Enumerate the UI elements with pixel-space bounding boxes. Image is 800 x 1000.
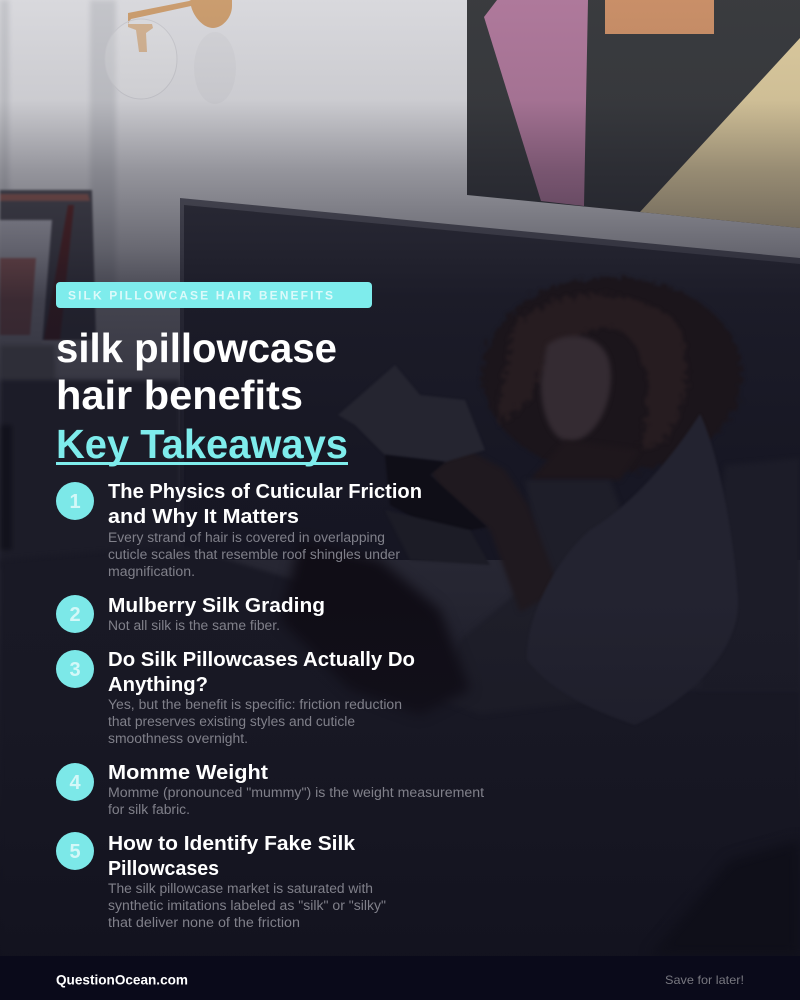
hair highlights	[495, 294, 687, 450]
title: hair benefits	[56, 372, 303, 418]
body 3	[108, 697, 402, 746]
body 4: Momme (pronounced "mummy") is the weight measurement	[108, 785, 484, 800]
title: silk pillowcase	[56, 325, 337, 371]
heading 1: and Why It Matters	[108, 505, 299, 528]
neck and chest	[530, 440, 640, 480]
takeaway 4	[56, 761, 484, 817]
title	[56, 325, 348, 467]
heading 5: How to Identify Fake Silk	[108, 832, 356, 855]
raised knee	[280, 540, 470, 715]
number badge 2: 2	[69, 604, 81, 626]
shirt and arm	[440, 480, 640, 715]
heading 1: The Physics of Cuticular Friction	[108, 480, 422, 503]
bed shadow bottom right	[650, 840, 800, 956]
table top	[0, 345, 55, 385]
book cover	[385, 455, 487, 535]
body 2: Not all silk is the same fiber.	[108, 618, 280, 633]
body 5: that deliver none of the friction	[108, 915, 300, 930]
bedside table	[0, 345, 180, 570]
body 1: cuticle scales that resemble roof shingles under	[108, 547, 401, 562]
table side	[0, 425, 12, 550]
number badge 4: 4	[69, 772, 81, 794]
body 1: magnification.	[108, 564, 195, 579]
heading 3: Do Silk Pillowcases Actually Do	[108, 648, 415, 671]
body 3: Yes, but the benefit is specific: friction reduction	[108, 697, 402, 712]
number badge 2	[56, 595, 94, 633]
heading 3	[108, 648, 415, 696]
back pillow	[700, 458, 800, 690]
heading 5: Pillowcases	[108, 857, 219, 880]
body 5: The silk pillowcase market is saturated with	[108, 881, 373, 896]
footer call to action: Save for later!	[665, 973, 744, 987]
headboard	[180, 198, 800, 560]
number badge 5	[56, 832, 94, 870]
woman reading in bed	[0, 277, 800, 1000]
bookshelf with records	[0, 190, 96, 345]
body 3: that preserves existing styles and cuticle	[108, 714, 355, 729]
badge: topic label: SILK PILLOWCASE HAIR BENEFITS	[68, 288, 333, 302]
blankets fade	[0, 600, 800, 960]
heading 1	[108, 480, 422, 528]
footer brand: QuestionOcean.com	[56, 972, 188, 988]
number badge 1	[56, 482, 94, 520]
table front and wall below	[0, 380, 180, 570]
heading 2: Mulberry Silk Grading	[108, 594, 325, 617]
body 1	[108, 530, 401, 579]
takeaway 3	[56, 648, 415, 746]
number badge 1: 1	[69, 491, 81, 513]
front pillow	[527, 414, 738, 725]
open book pages	[338, 365, 485, 462]
forearm and hand	[430, 448, 560, 612]
body 5: synthetic imitations labeled as "silk" or "silky"	[108, 898, 386, 913]
heading 5	[108, 832, 356, 880]
number badge 5: 5	[69, 841, 81, 863]
title highlight: Key Takeaways: Key Takeaways	[56, 421, 348, 467]
takeaway 1	[56, 480, 422, 579]
wall lamp	[105, 0, 236, 104]
lower bedding	[0, 545, 800, 1000]
badge: topic label	[56, 282, 372, 308]
number badge 4	[56, 763, 94, 801]
body 5	[108, 881, 386, 930]
body 4: for silk fabric.	[108, 802, 190, 817]
takeaway 5	[56, 832, 386, 930]
body 3: smoothness overnight.	[108, 731, 248, 746]
takeaway 2	[56, 594, 325, 633]
body 4	[108, 785, 484, 817]
framed painting	[467, 0, 800, 228]
number badge 3	[56, 650, 94, 688]
heading 4: Momme Weight	[108, 761, 268, 784]
heading 3: Anything?	[108, 673, 208, 696]
number badge 3: 3	[69, 659, 81, 681]
hair	[482, 277, 742, 473]
body 1: Every strand of hair is covered in overlapping	[108, 530, 385, 545]
lower book page	[385, 510, 490, 565]
footer bar	[0, 956, 800, 1000]
wall column	[0, 0, 116, 300]
face	[541, 336, 611, 442]
